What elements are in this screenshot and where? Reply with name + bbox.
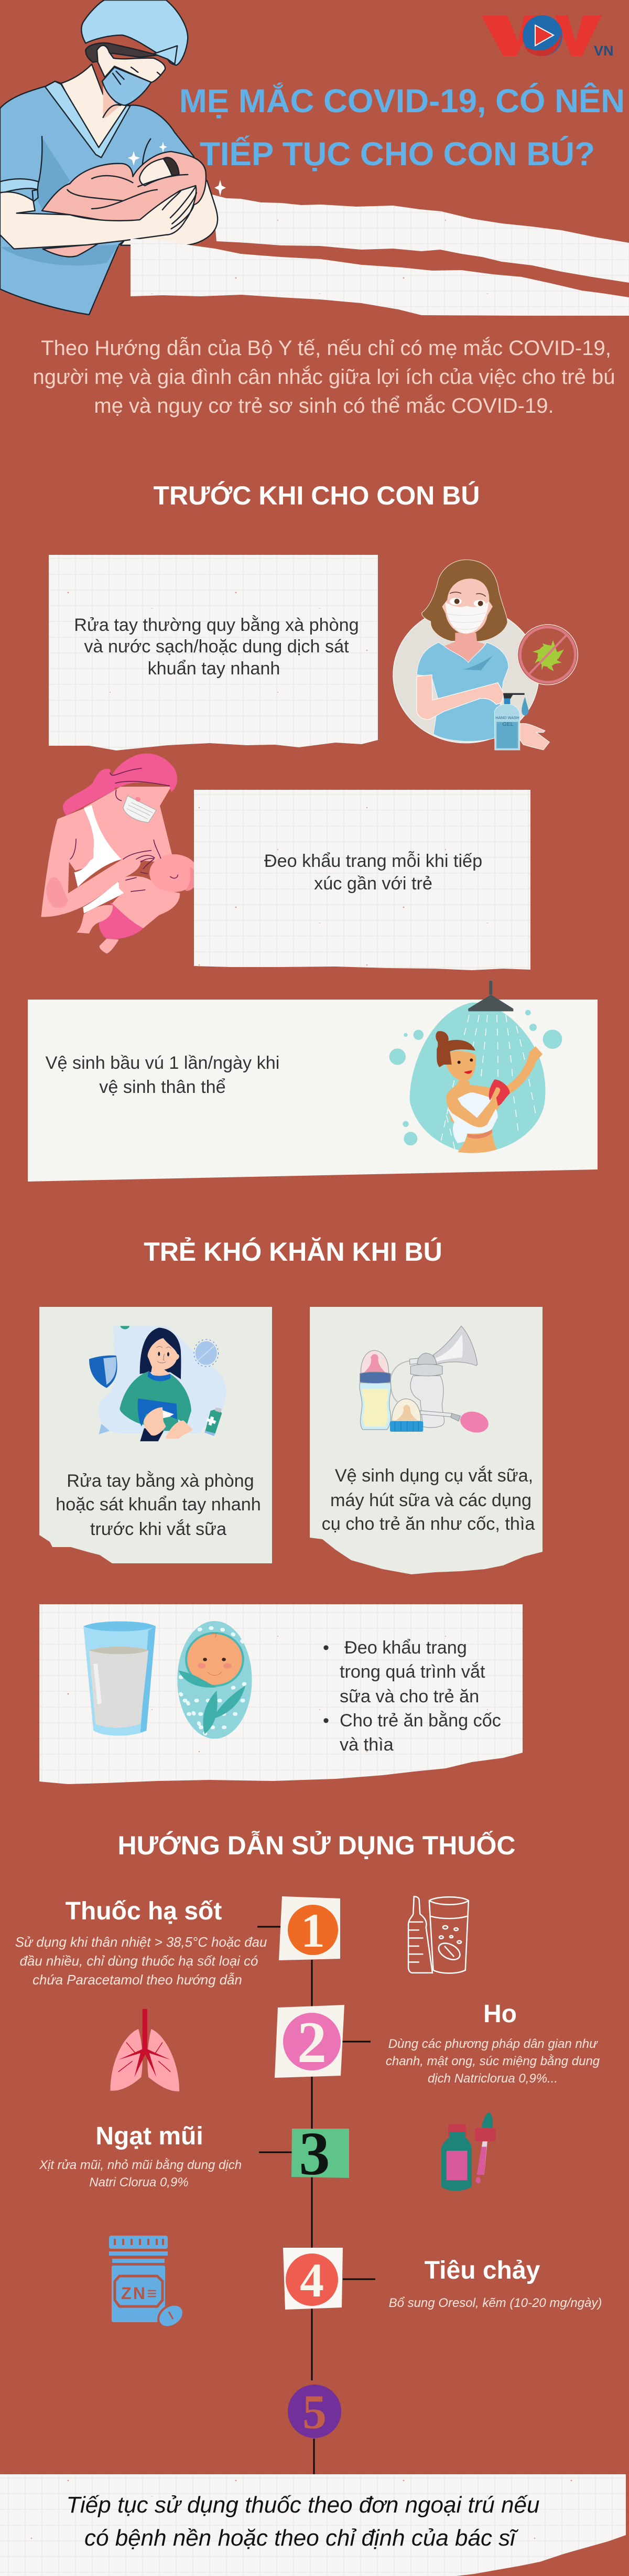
- heading: before breastfeeding: TRƯỚC KHI CHO CON BÚ: [153, 481, 480, 510]
- step 1: fever: chứa Paracetamol theo hướng dẫn: [32, 1972, 242, 1988]
- illustration: masked mother breastfeeding: [41, 754, 198, 953]
- illustration: masked woman using hand gel: HAND WASH: [495, 715, 519, 720]
- step 4: diarrhea: [283, 2248, 602, 2310]
- panel: clean pumping tools: Vệ sinh dụng cụ vắt sữa,: [335, 1465, 533, 1486]
- step 1: fever: [15, 1896, 340, 1988]
- panel: wash hands: [49, 555, 378, 750]
- step 5: purple number: 5: [302, 2385, 327, 2439]
- icon: effervescent tablet and vial: [408, 1896, 469, 1973]
- number tile 3: 3: [299, 2119, 330, 2188]
- step 2: cough: Dùng các phương pháp dân gian như: [388, 2037, 598, 2051]
- logo: VOV.VN: VN: [594, 43, 614, 59]
- step 4: diarrhea: Bổ sung Oresol, kẽm (10-20 mg/ngày): [389, 2296, 602, 2310]
- number tile 4: [283, 2248, 343, 2310]
- intro text: [32, 336, 615, 417]
- step 2: cough: chanh, mật ong, súc miệng bằng dung: [386, 2054, 600, 2068]
- panel: mask and feeding by cup: •: [323, 1638, 329, 1658]
- torn paper strip, lower: [131, 239, 629, 316]
- title: TIẾP TỤC CHO CON BÚ?: [200, 135, 595, 173]
- panel: wear mask: [194, 790, 530, 970]
- step 3: stuffy nose: [39, 2119, 349, 2189]
- step 3: stuffy nose: Xịt rửa mũi, nhỏ mũi bằng dung dịch: [39, 2158, 242, 2172]
- number tile 2: [275, 2005, 344, 2078]
- heading: baby has trouble feeding: TRẺ KHÓ KHĂN KHI BÚ: [144, 1237, 442, 1266]
- closing panel: có bệnh nền hoặc theo chỉ định của bác sĩ: [84, 2525, 519, 2551]
- intro text: mẹ và nguy cơ trẻ sơ sinh có thể mắc COVID-19.: [94, 394, 554, 417]
- step 2: cough: dịch Natriclorua 0,9%...: [428, 2071, 558, 2086]
- panel: breast hygiene: [28, 1000, 598, 1182]
- heading: medication guide: HƯỚNG DẪN SỬ DỤNG THUỐC: [118, 1830, 515, 1860]
- step 1: fever: đầu nhiều, chỉ dùng thuốc hạ sốt loại có: [20, 1954, 258, 1969]
- panel: wash hands before pumping: Rửa tay bằng xà phòng: [67, 1471, 254, 1491]
- illustration: breast pump and bottles: [360, 1326, 491, 1435]
- panel: wash hands: và nước sạch/hoặc dung dịch sát: [84, 637, 349, 657]
- panel: wear mask: xúc gần với trẻ: [314, 874, 432, 894]
- illustration: masked woman using hand gel: [393, 560, 578, 750]
- step 3: stuffy nose: Ngạt mũi: [95, 2122, 203, 2150]
- panel: mask and feeding by cup: •: [323, 1711, 329, 1731]
- panel: mask and feeding by cup: sữa và cho trẻ ăn: [340, 1687, 479, 1706]
- illustration: woman with sanitizer: [89, 1326, 226, 1441]
- number tile 1: 1: [301, 1904, 325, 1957]
- panel: wash hands: khuẩn tay nhanh: [148, 659, 280, 679]
- title: MẸ MẮC COVID-19, CÓ NÊN: [179, 82, 625, 120]
- number tile 3: [291, 2119, 349, 2188]
- closing panel: [0, 2474, 626, 2576]
- step 5: purple number: [288, 2385, 341, 2439]
- panel: wear mask: Đeo khẩu trang mỗi khi tiếp: [264, 851, 482, 871]
- panel: wash hands before pumping: [39, 1307, 272, 1563]
- panel: clean pumping tools: máy hút sữa và các dụng: [330, 1490, 532, 1510]
- illustration: swaddled baby: [177, 1621, 252, 1738]
- icon: lungs: [110, 2009, 179, 2091]
- logo: VOV.VN: [481, 15, 614, 59]
- step 4: diarrhea: Tiêu chảy: [425, 2257, 540, 2284]
- panel: mask and feeding by cup: Đeo khẩu trang: [344, 1638, 467, 1658]
- illustration: masked woman using hand gel: GEL: [502, 721, 514, 727]
- panel: wash hands before pumping: trước khi vắt sữa: [90, 1519, 227, 1539]
- panel: breast hygiene: vệ sinh thân thể: [99, 1077, 226, 1097]
- panel: mask and feeding by cup: Cho trẻ ăn bằng cốc: [340, 1710, 501, 1731]
- closing panel: Tiếp tục sử dụng thuốc theo đơn ngoại trú nếu: [67, 2492, 539, 2518]
- icon: nasal dropper bottle: [441, 2112, 496, 2191]
- panel: mask and feeding by cup: [39, 1604, 523, 1784]
- step 2: cough: Ho: [483, 2000, 517, 2028]
- torn paper strip, upper: [212, 195, 629, 283]
- intro text: người mẹ và gia đình cân nhắc giữa lợi ích của việc cho trẻ bú: [32, 365, 615, 389]
- step 3: stuffy nose: Natri Clorua 0,9%: [89, 2175, 189, 2189]
- timeline connector lines: [257, 1927, 375, 2474]
- panel: clean pumping tools: cụ cho trẻ ăn như cốc, thìa: [322, 1514, 535, 1534]
- step 2: cough: [275, 2000, 600, 2086]
- number tile 1: [279, 1896, 340, 1960]
- icon: zinc pill bottle: [109, 2236, 188, 2332]
- panel: clean pumping tools: [310, 1307, 543, 1574]
- intro text: Theo Hướng dẫn của Bộ Y tế, nếu chỉ có mẹ mắc COVID-19,: [41, 336, 611, 360]
- illustration: woman showering: [389, 981, 562, 1153]
- number tile 4: 4: [300, 2253, 324, 2307]
- illustration: doctor holding newborn: [0, 0, 226, 315]
- step 1: fever: Thuốc hạ sốt: [66, 1897, 222, 1925]
- number tile 2: 2: [297, 2010, 327, 2075]
- icon: zinc pill bottle: ZN≡: [121, 2284, 157, 2303]
- step 1: fever: Sử dụng khi thân nhiệt > 38,5°C hoặc đau: [15, 1935, 267, 1950]
- panel: mask and feeding by cup: trong quá trình vắt: [340, 1661, 485, 1682]
- title: [179, 82, 625, 173]
- panel: wash hands: Rửa tay thường quy bằng xà phòng: [74, 615, 359, 635]
- panel: breast hygiene: Vệ sinh bầu vú 1 lần/ngày khi: [46, 1053, 279, 1073]
- illustration: glass of milk: [83, 1622, 156, 1736]
- panel: mask and feeding by cup: và thìa: [340, 1735, 394, 1755]
- panel: wash hands before pumping: hoặc sát khuẩn tay nhanh: [56, 1495, 261, 1515]
